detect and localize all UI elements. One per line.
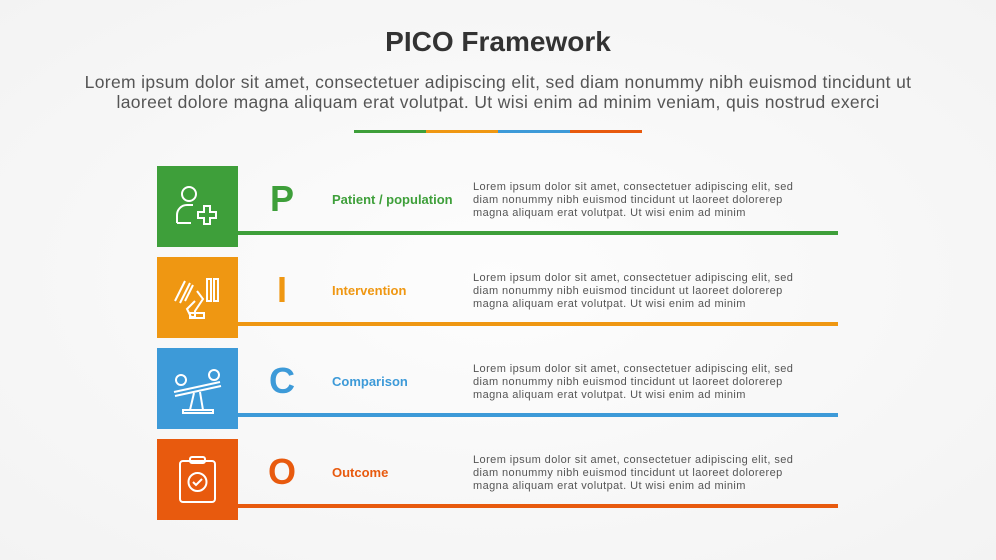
- desc P: magna aliquam erat volutpat. Ut wisi enim ad minim: [473, 207, 746, 219]
- icon box: outcome: [157, 439, 238, 520]
- desc I: [473, 272, 793, 310]
- color divider: [354, 130, 642, 133]
- icon box: intervention: [157, 257, 238, 338]
- row: P: [157, 166, 838, 247]
- desc I: Lorem ipsum dolor sit amet, consectetuer adipiscing elit, sed: [473, 272, 793, 284]
- desc P: [473, 181, 793, 219]
- label P: Patient / population: [332, 192, 453, 207]
- subtitle: Lorem ipsum dolor sit amet, consectetuer adipiscing elit, sed diam nonummy nibh euismod tincidunt ut: [85, 72, 911, 92]
- desc P: diam nonummy nibh euismod tincidunt ut laoreet dolorerep: [473, 194, 783, 206]
- line O: [238, 504, 838, 508]
- desc I: diam nonummy nibh euismod tincidunt ut laoreet dolorerep: [473, 285, 783, 297]
- desc I: magna aliquam erat volutpat. Ut wisi enim ad minim: [473, 298, 746, 310]
- line I: [238, 322, 838, 326]
- icon box: comparison: [157, 348, 238, 429]
- subtitle: laoreet dolore magna aliquam erat volutpat. Ut wisi enim ad minim veniam, quis nostrud exerci: [116, 92, 880, 112]
- desc O: [473, 454, 793, 492]
- letter O: O: [268, 451, 296, 492]
- desc C: Lorem ipsum dolor sit amet, consectetuer adipiscing elit, sed: [473, 363, 793, 375]
- label O: Outcome: [332, 465, 388, 480]
- desc P: Lorem ipsum dolor sit amet, consectetuer adipiscing elit, sed: [473, 181, 793, 193]
- icon box: patient: [157, 166, 238, 247]
- line P: [238, 231, 838, 235]
- desc C: diam nonummy nibh euismod tincidunt ut laoreet dolorerep: [473, 376, 783, 388]
- title: PICO Framework: [385, 26, 611, 57]
- letter C: C: [269, 360, 295, 401]
- row: O: [157, 439, 838, 520]
- row: I: [157, 257, 838, 338]
- desc C: magna aliquam erat volutpat. Ut wisi enim ad minim: [473, 389, 746, 401]
- row: C: [157, 348, 838, 429]
- desc O: Lorem ipsum dolor sit amet, consectetuer adipiscing elit, sed: [473, 454, 793, 466]
- label I: Intervention: [332, 283, 406, 298]
- letter I: I: [277, 269, 287, 310]
- desc C: [473, 363, 793, 401]
- subtitle: [85, 72, 911, 112]
- desc O: magna aliquam erat volutpat. Ut wisi enim ad minim: [473, 480, 746, 492]
- letter P: P: [270, 178, 294, 219]
- label C: Comparison: [332, 374, 408, 389]
- line C: [238, 413, 838, 417]
- desc O: diam nonummy nibh euismod tincidunt ut laoreet dolorerep: [473, 467, 783, 479]
